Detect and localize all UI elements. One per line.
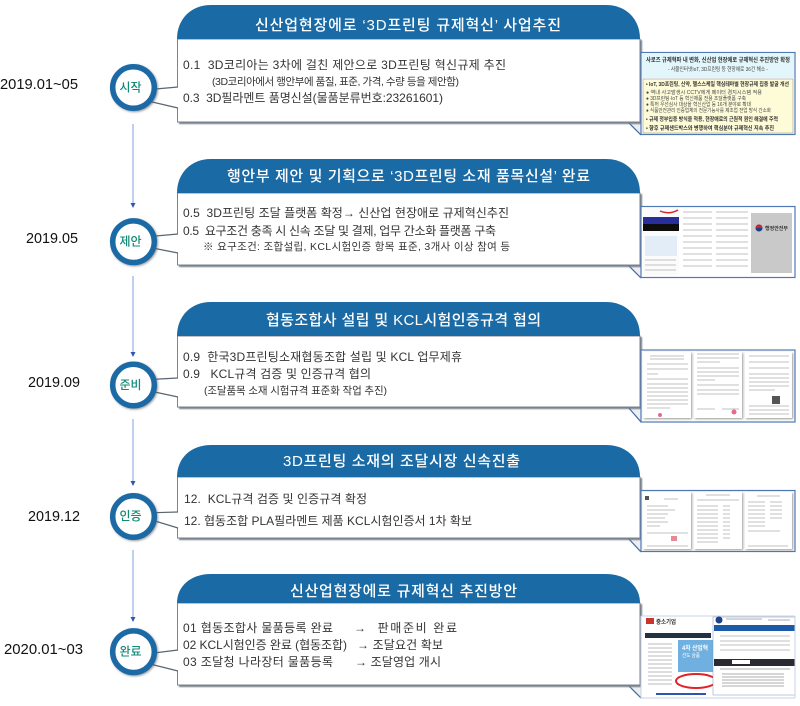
date: 2019.12: 2019.12 [28,508,80,525]
text block [184,492,472,528]
text block: 0.3 3D필라멘트 품명신설(물품분류번호:23261601) [183,91,443,105]
thumbnail: 규제혁신 document: ● 특허 우선심사 대상을 혁신산업 등 16개 분야로 확대 [646,101,751,108]
card header [177,5,640,39]
thumbnail: 규제혁신 document: - 사물인터넷IoT, 3D프린팅 등 현장애로 36건 해소 - [668,65,768,73]
date: 2019.05: 2019.05 [26,230,78,247]
text block [183,350,462,397]
heading: 3D프린팅 소재의 조달시장 신속진출 [283,453,520,470]
thumbnail callout wedge [628,538,641,552]
circle: 완료: 완료 [119,644,142,658]
step 1: 시작 [0,5,795,135]
thumbnail callout wedge [628,407,641,422]
step 3: 준비 [28,302,795,422]
step 4: 인증 [28,445,795,552]
text block: → 조달요건 확보 [357,638,443,652]
thumbnail: 행정안전부 documents: 행정안전부 [765,225,788,232]
circle: 제안 [113,221,154,262]
heading: 신산업현장에로 규제혁신 추진방안 [290,583,517,600]
text block: 0.5 3D프린팅 조달 플랫폼 확정→ 신산업 현장애로 규제혁신추진 [183,206,509,220]
text block [183,58,506,105]
arrow: 제안 to 준비 [130,276,136,357]
text block: 01 협동조합사 물품등록 완료 [183,621,333,635]
card header [177,445,640,477]
thumbnail: 규제혁신 document: ● 식품안전관리 인증업체의 전문기능사를 제조업 전업 방식 간소화 [646,107,771,114]
arrow: 시작 to 제안 [130,124,136,208]
text block: 0.9 KCL규격 검증 및 인증규격 협의 [183,367,371,381]
thumbnail: 나라장터 screens: 중소기업 [656,618,676,626]
step 2: 제안 [26,159,795,278]
text block: 0.1 3D코리아는 3차에 걸친 제안으로 3D프린팅 혁신규제 추진 [183,58,506,72]
heading: 신산업현장에로 ‘3D프린팅 규제혁신’ 사업추진 [255,17,561,34]
circle: 인증: 인증 [119,509,142,523]
thumbnail: 규제혁신 document: • 향후 규제샌드박스와 병행하여 핵심분야 규제혁신 지속 추진 [646,124,774,132]
connector [150,87,178,108]
connector [150,234,178,253]
circle: 준비 [113,364,154,406]
panel: card 5 [177,574,642,687]
thumbnail: 나라장터 screens: 선도 상품 [682,652,700,659]
thumbnail: 규제혁신 document: ● 역내 사고발생시 CCTV에게 메이터 경지시스템 적용 [646,89,762,96]
thumbnail: 행정안전부 documents [641,206,795,278]
step 5: 완료 [4,574,795,698]
thumbnail: 규제혁신 document [641,52,795,134]
date: 2019.01~05: 2019.01~05 [0,76,78,93]
thumbnail callout wedge [628,685,641,698]
thumbnail: 규제혁신 document: ● 3D프린팅·IoT 등 혁신제품 전용 조달플랫폼 구축 [646,95,746,102]
text block: 02 KCL시험인증 완료 (협동조합) [183,638,347,652]
text block: 03 조달청 나라장터 물품등록 [183,655,333,669]
text block [183,206,510,253]
thumbnail callout wedge [628,265,641,278]
circle: 제안: 제안 [119,234,142,248]
circle: 시작 [113,67,154,108]
date: 2019.09: 2019.09 [28,374,80,391]
text block: (3D코리아에서 행안부에 품질, 표준, 가격, 수량 등을 제안함) [212,75,459,88]
circle: 완료 [113,631,154,672]
circle: 인증 [113,496,154,537]
text block: ※ 요구조건: 조합설립, KCL시험인증 항목 표준, 3개사 이상 참여 등 [203,240,510,253]
thumbnail: 규제혁신 document: • 규제 정부입증 방식을 적용, 현장애로의 근원적 원인 해결에 주력 [646,115,778,123]
text block: 12. 협동조합 PLA필라멘트 제품 KCL시험인증서 1차 확보 [184,514,472,528]
card header [177,574,640,603]
text block: 0.5 요구조건 충족 시 신속 조달 및 결제, 업무 간소화 플랫폼 구축 [183,224,496,238]
card header [177,159,640,193]
circle: 준비: 준비 [119,378,142,392]
card header [177,302,640,336]
text block: 12. KCL규격 검증 및 인증규격 확정 [184,492,367,506]
text block: 0.9 한국3D프린팅소재협동조합 설립 및 KCL 업무제휴 [183,350,462,364]
arrow: 준비 to 인증 [130,419,136,486]
thumbnail: 나라장터 screens: 4차 산업혁 [682,644,708,652]
thumbnail: 시험성적서 documents [641,490,795,552]
text block: (조달품목 소재 시험규격 표준화 작업 추진) [204,384,387,397]
text block: → 조달영업 개시 [355,655,441,669]
panel: card 1 [177,5,642,124]
heading: 협동조합사 설립 및 KCL시험인증규격 협의 [266,312,541,329]
connector [150,378,178,397]
connector [150,512,178,528]
text block: → 판매준비 완료 [354,621,457,635]
thumbnail: 나라장터 screens [641,616,795,698]
text block [183,621,457,669]
circle: 시작: 시작 [119,80,142,94]
date: 2020.01~03: 2020.01~03 [4,641,83,658]
arrow: 인증 to 완료 [130,550,136,622]
thumbnail: 협약 documents [641,350,795,422]
connector [150,650,178,671]
panel: card 4 [177,445,642,540]
heading: 행안부 제안 및 기획으로 ‘3D프린팅 소재 품목신설’ 완료 [227,168,590,185]
panel: card 3 [177,302,642,409]
thumbnail callout wedge [628,122,641,135]
panel: card 2 [177,159,642,267]
